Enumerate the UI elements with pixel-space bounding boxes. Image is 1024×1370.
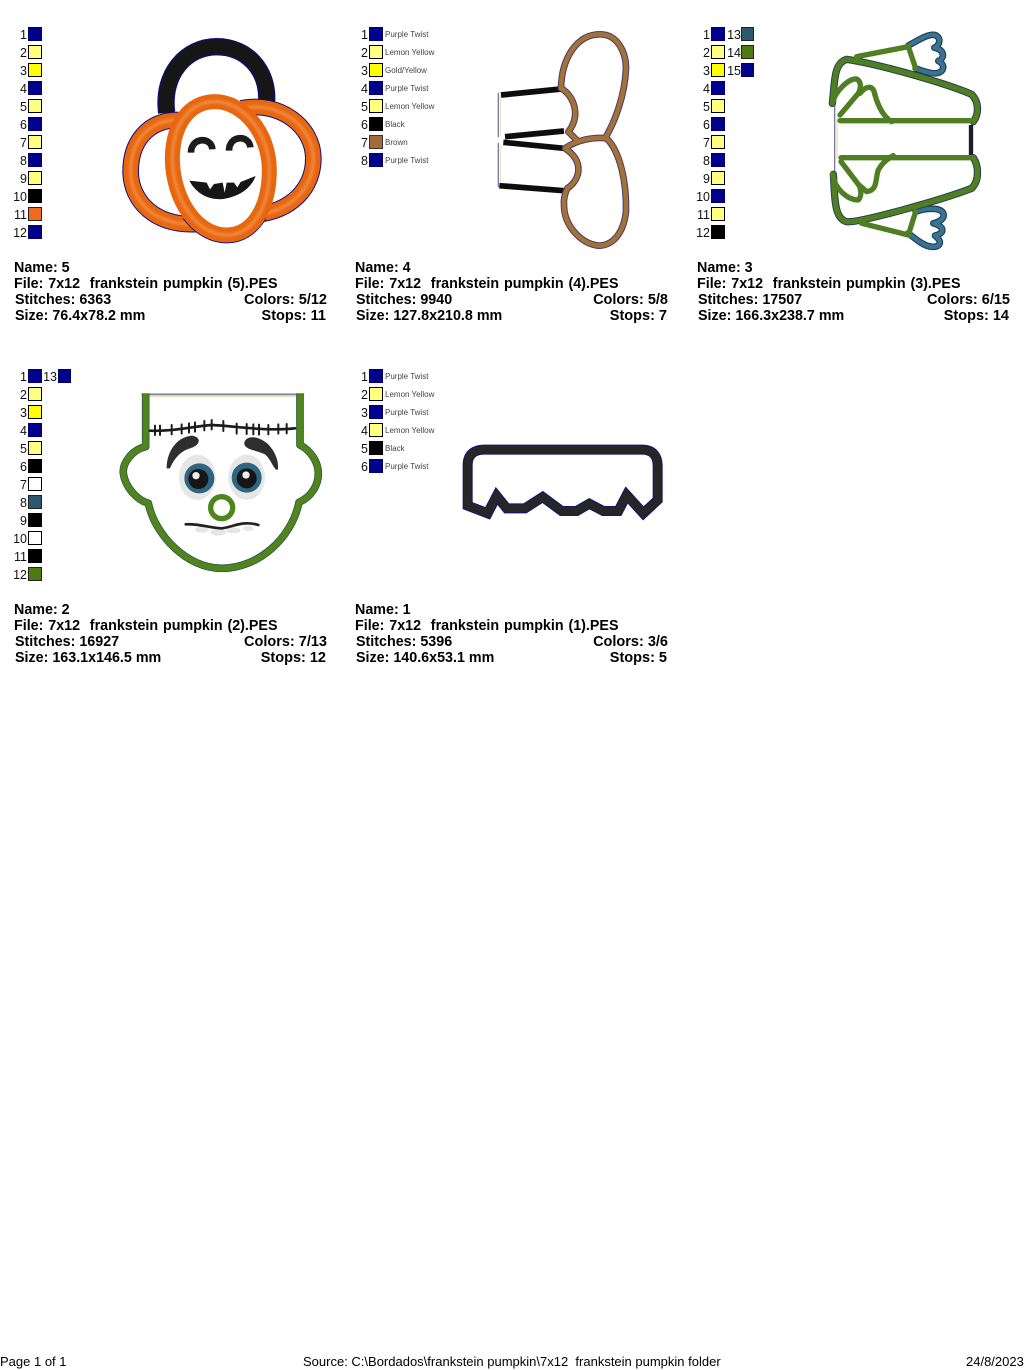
legend: design 2 thread colours: 9 [20, 514, 27, 528]
legend: design 3 thread colours: 13 [727, 28, 741, 42]
legend: design 1 thread colours: Lemon Yellow [385, 426, 435, 435]
info block: design 1: File: 7x12 frankstein pumpkin (1).PES [355, 618, 619, 634]
legend: design 3 thread colours: 4 [703, 82, 710, 96]
info block: design 5 [14, 260, 327, 324]
info block: design 4: Name: 4 [355, 260, 411, 276]
legend: design 1 thread colours: Purple Twist [385, 462, 429, 471]
legend: design 4 thread colours: Brown [385, 138, 408, 147]
legend: design 2 thread colours: 13 [43, 370, 57, 384]
legend: design 4 thread colours: 8 [361, 154, 368, 168]
info block: design 4: Colors: 5/8 [593, 292, 668, 308]
illustration: Frankenstein head [123, 393, 318, 568]
legend: design 4 thread colours: 1 [361, 28, 368, 42]
info block: design 2: Colors: 7/13 [244, 634, 327, 650]
legend: design 3 thread colours: 9 [703, 172, 710, 186]
info block: design 2: Name: 2 [14, 602, 70, 618]
info block: design 2: Stitches: 16927 [15, 634, 119, 650]
legend: design 3 thread colours: 10 [696, 190, 710, 204]
panel: design 4 brown lobes [355, 28, 668, 324]
illustration: pumpkin with black handle [131, 47, 313, 235]
legend: design 3 thread colours: 3 [703, 64, 710, 78]
illustration: brown lobes with black bars [498, 34, 626, 246]
legend: design 4 thread colours: 3 [361, 64, 368, 78]
legend: design 2 thread colours: 11 [14, 550, 27, 564]
info block: design 3: Name: 3 [697, 260, 753, 276]
info block: design 3: File: 7x12 frankstein pumpkin (3).PES [697, 276, 961, 292]
legend: design 3 thread colours: 8 [703, 154, 710, 168]
legend: design 3 thread colours: 12 [696, 226, 710, 240]
panel: design 2 Frankenstein face [13, 370, 327, 666]
info block: design 4 [355, 260, 668, 324]
info block: design 1 [355, 602, 668, 666]
info block: design 2: Stops: 12 [261, 650, 326, 666]
legend: design 1 thread colours: 6 [361, 460, 368, 474]
legend: design 5 thread colours: 8 [20, 154, 27, 168]
footer: page number, source path and date [0, 1354, 1024, 1369]
legend: design 4 thread colours: 4 [361, 82, 368, 96]
legend: design 4 thread colours: 6 [361, 118, 368, 132]
legend: design 5 thread colours: 2 [20, 46, 27, 60]
legend: design 4 thread colours: Lemon Yellow [385, 102, 435, 111]
footer: page number, source path and date: 24/8/2023 [966, 1354, 1024, 1369]
info block: design 5: Stops: 11 [262, 308, 326, 324]
legend: design 5 thread colours: 11 [14, 208, 27, 222]
info block: design 5: Stitches: 6363 [15, 292, 111, 308]
legend: design 3 thread colours: 11 [697, 208, 710, 222]
panel: design 5 pumpkin [13, 28, 327, 324]
info block: design 5: Size: 76.4x78.2 mm [15, 308, 145, 324]
legend: design 1 thread colours: 3 [361, 406, 368, 420]
legend: design 2 thread colours: 8 [20, 496, 27, 510]
legend: design 3 thread colours: 6 [703, 118, 710, 132]
panel: design 1 hair piece [355, 370, 668, 666]
info block: design 1: Colors: 3/6 [593, 634, 668, 650]
info block: design 4: Size: 127.8x210.8 mm [356, 308, 502, 324]
legend: design 3 thread colours: 15 [727, 64, 741, 78]
legend: design 4 thread colours: 2 [361, 46, 368, 60]
legend: design 2 thread colours [13, 370, 70, 582]
legend: design 5 thread colours: 1 [20, 28, 27, 42]
legend: design 4 thread colours: Purple Twist [385, 30, 429, 39]
legend: design 2 thread colours: 3 [20, 406, 27, 420]
legend: design 2 thread colours: 4 [20, 424, 27, 438]
illustration: green body with hands [832, 35, 977, 247]
info block: design 5: File: 7x12 frankstein pumpkin (5).PES [14, 276, 278, 292]
legend: design 2 thread colours: 7 [20, 478, 27, 492]
info block: design 2 [14, 602, 327, 666]
legend: design 4 thread colours [361, 28, 435, 168]
legend: design 5 thread colours: 4 [20, 82, 27, 96]
legend: design 4 thread colours: Lemon Yellow [385, 48, 435, 57]
legend: design 5 thread colours: 10 [13, 190, 27, 204]
legend: design 1 thread colours: Black [385, 444, 406, 453]
info block: design 4: Stitches: 9940 [356, 292, 452, 308]
legend: design 4 thread colours: 7 [361, 136, 368, 150]
legend: design 2 thread colours: 6 [20, 460, 27, 474]
legend: design 1 thread colours: Purple Twist [385, 372, 429, 381]
legend: design 3 thread colours: 14 [727, 46, 741, 60]
info block: design 5: Name: 5 [14, 260, 70, 276]
info block: design 1: Stitches: 5396 [356, 634, 452, 650]
legend: design 2 thread colours: 10 [13, 532, 27, 546]
info block: design 3: Stops: 14 [944, 308, 1009, 324]
legend: design 5 thread colours: 3 [20, 64, 27, 78]
info block: design 3: Stitches: 17507 [698, 292, 802, 308]
legend: design 5 thread colours: 5 [20, 100, 27, 114]
legend: design 1 thread colours [361, 370, 435, 474]
info block: design 4: Stops: 7 [610, 308, 667, 324]
legend: design 2 thread colours: 12 [13, 568, 27, 582]
info block: design 4: File: 7x12 frankstein pumpkin (4).PES [355, 276, 619, 292]
legend: design 3 thread colours: 5 [703, 100, 710, 114]
illustration: jagged black hair outline [468, 450, 658, 513]
legend: design 5 thread colours: 6 [20, 118, 27, 132]
info block: design 3 [697, 260, 1010, 324]
legend: design 4 thread colours: 5 [361, 100, 368, 114]
legend: design 2 thread colours: 1 [20, 370, 27, 384]
legend: design 1 thread colours: 4 [361, 424, 368, 438]
legend: design 5 thread colours: 12 [13, 226, 27, 240]
info block: design 5: Colors: 5/12 [244, 292, 327, 308]
info block: design 1: Name: 1 [355, 602, 411, 618]
legend: design 4 thread colours: Gold/Yellow [385, 66, 427, 75]
legend: design 1 thread colours: Purple Twist [385, 408, 429, 417]
legend: design 3 thread colours: 1 [703, 28, 710, 42]
legend: design 2 thread colours: 5 [20, 442, 27, 456]
legend: design 5 thread colours: 7 [20, 136, 27, 150]
info block: design 1: Size: 140.6x53.1 mm [356, 650, 494, 666]
info block: design 3: Colors: 6/15 [927, 292, 1010, 308]
footer: page number, source path and date: Page 1 of 1 [0, 1354, 66, 1369]
legend: design 1 thread colours: 1 [361, 370, 368, 384]
legend: design 5 thread colours [13, 28, 42, 240]
info block: design 1: Stops: 5 [610, 650, 667, 666]
legend: design 1 thread colours: 5 [361, 442, 368, 456]
legend: design 1 thread colours: Lemon Yellow [385, 390, 435, 399]
legend: design 4 thread colours: Purple Twist [385, 84, 429, 93]
footer: page number, source path and date: Source: C:\Bordados\frankstein pumpkin\7x12 frankstein pumpkin folder [303, 1354, 721, 1369]
info block: design 3: Size: 166.3x238.7 mm [698, 308, 844, 324]
legend: design 3 thread colours [696, 28, 754, 240]
legend: design 5 thread colours: 9 [20, 172, 27, 186]
info block: design 2: Size: 163.1x146.5 mm [15, 650, 161, 666]
legend: design 4 thread colours: Purple Twist [385, 156, 429, 165]
panel: design 3 green body [696, 28, 1010, 324]
legend: design 3 thread colours: 7 [703, 136, 710, 150]
info block: design 2: File: 7x12 frankstein pumpkin (2).PES [14, 618, 278, 634]
legend: design 1 thread colours: 2 [361, 388, 368, 402]
legend: design 3 thread colours: 2 [703, 46, 710, 60]
legend: design 4 thread colours: Black [385, 120, 406, 129]
legend: design 2 thread colours: 2 [20, 388, 27, 402]
